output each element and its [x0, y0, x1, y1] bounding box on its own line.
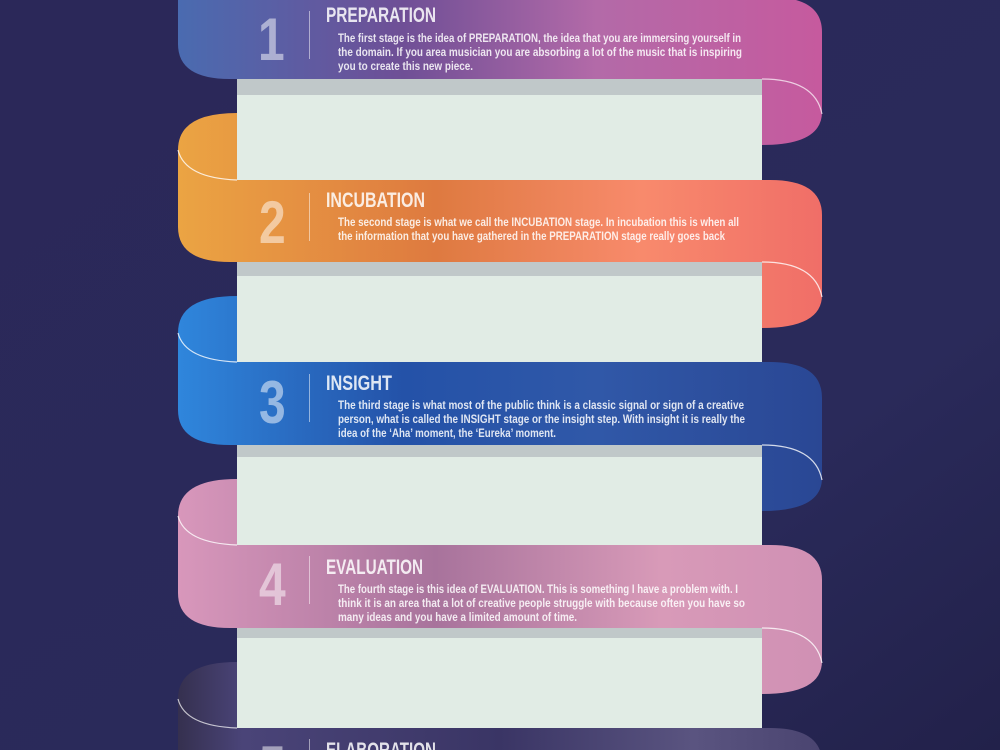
- ribbon 1: preparation: PREPARATION: [326, 4, 436, 27]
- ribbon 1: preparation: 1: [258, 6, 285, 73]
- ribbon 1: preparation: The first stage is the idea of PREPARATION, the idea that you are immersing yourself in: [338, 33, 741, 45]
- ribbon 4: evaluation: The fourth stage is this idea of EVALUATION. This is something I have a problem with. I: [338, 584, 738, 596]
- panel shadows: [237, 79, 762, 638]
- ribbon 4: evaluation: 4: [259, 551, 286, 618]
- central panel: [237, 0, 762, 750]
- ribbon 4: evaluation: many ideas and you have a limited amount of time.: [338, 612, 577, 624]
- ribbon 3: insight: 3: [259, 369, 286, 436]
- ribbon 3: insight: idea of the ‘Aha’ moment, the ‘Eureka’ moment.: [338, 428, 556, 440]
- ribbon 3: insight: The third stage is what most of the public think is a classic signal or sign of a creative: [338, 400, 744, 412]
- ribbon 4: evaluation: EVALUATION: [326, 556, 423, 579]
- ribbon 3: insight: INSIGHT: [326, 372, 392, 395]
- ribbon 4: evaluation: [178, 479, 822, 694]
- ribbon 2: incubation: The second stage is what we call the INCUBATION stage. In incubation this is when all: [338, 217, 739, 229]
- ribbon 2: incubation: the information that you have gathered in the PREPARATION stage really goes back: [338, 231, 726, 243]
- ribbon 1: preparation: you to create this new piece.: [338, 61, 473, 73]
- ribbon 2: incubation: 2: [259, 189, 286, 256]
- ribbon 2: incubation: [178, 113, 822, 328]
- ribbon 1: preparation: [178, 0, 822, 145]
- ribbon 3: insight: person, what is called the INSIGHT stage or the insight step. With insight it is really the: [338, 414, 745, 426]
- ribbon 2: incubation: INCUBATION: [326, 189, 425, 212]
- ribbon 3: insight: [178, 296, 822, 511]
- ribbon 4: evaluation: think it is an area that a lot of creative people struggle with because often you have so: [338, 598, 745, 610]
- ribbon 5: elaboration: [178, 662, 822, 750]
- ribbon 1: preparation: the domain. If you area musician you are absorbing a lot of the music that is inspiring: [338, 47, 742, 59]
